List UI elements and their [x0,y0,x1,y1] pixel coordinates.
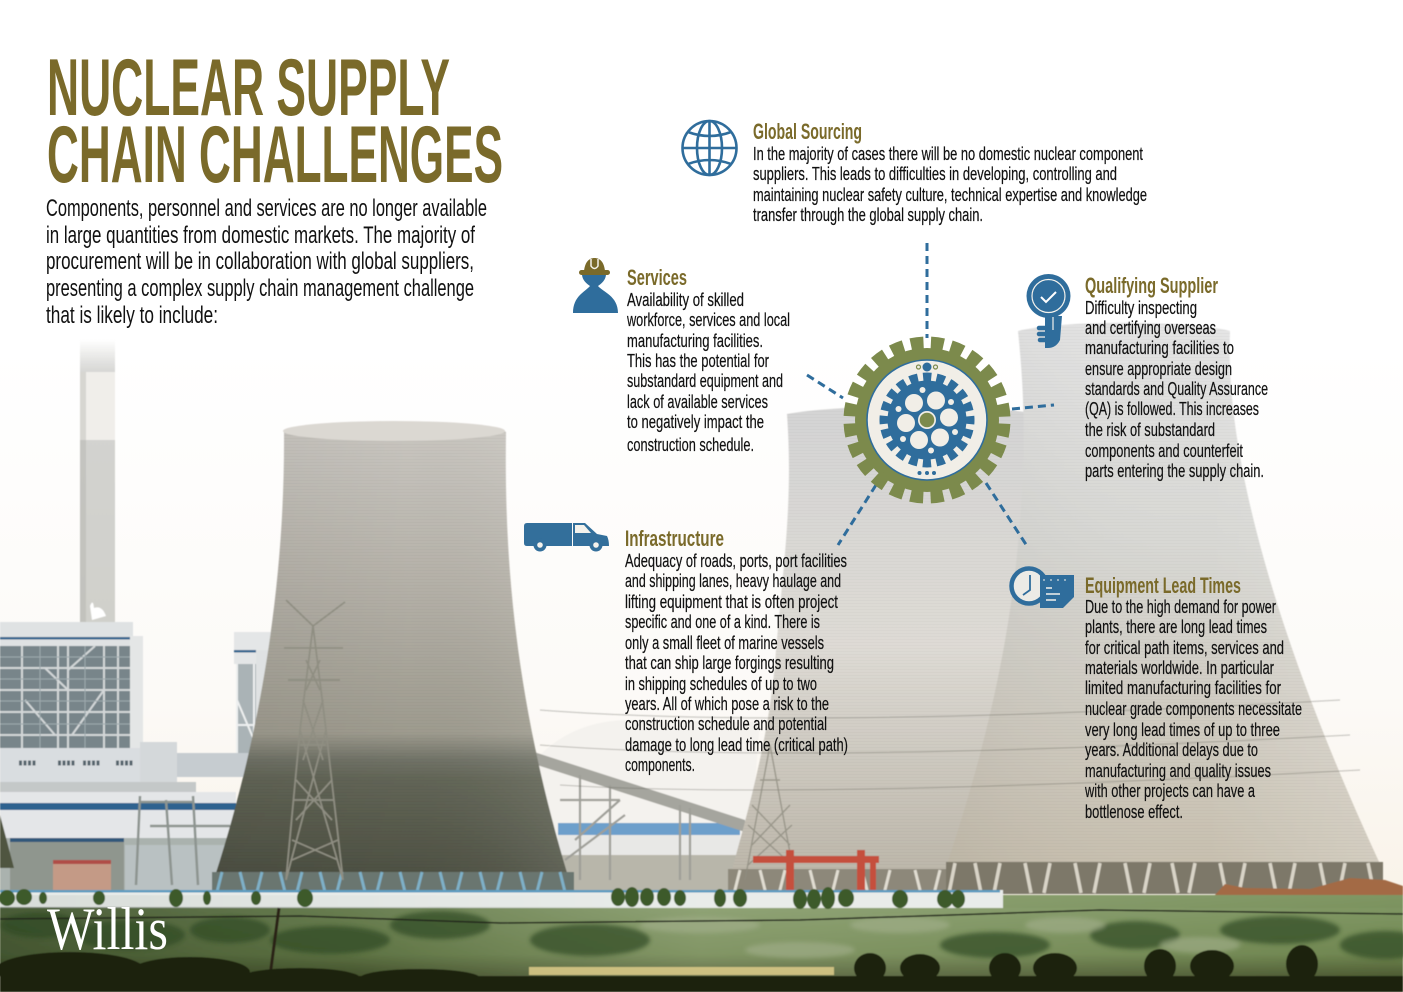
panel: services: manufacturing facilities. [627,331,763,351]
panel: qualifying supplier: (QA) is followed. This increases [1085,399,1259,419]
panel: qualifying supplier: components and counterfeit [1085,441,1243,461]
panel: services: Availability of skilled [627,290,744,310]
panel: equipment lead times [1084,573,1302,822]
panel: qualifying supplier: manufacturing facilities to [1085,338,1234,358]
panel: services: substandard equipment and [627,371,783,391]
panel: global sourcing: In the majority of cases there will be no domestic nuclear component [753,144,1143,164]
panel: qualifying supplier: parts entering the supply chain. [1085,461,1264,481]
panel: services: workforce, services and local [626,310,790,330]
panel: global sourcing: suppliers. This leads to difficulties in developing, controlling and [753,164,1117,184]
panel: infrastructure [625,526,848,775]
panel: equipment lead times: limited manufacturing facilities for [1085,678,1281,698]
panel: equipment lead times: bottlenose effect. [1085,802,1183,822]
intro text: presenting a complex supply chain management challenge [46,275,474,302]
middle cooling tower [728,406,1040,885]
panel: qualifying supplier: standards and Quality Assurance [1085,379,1268,399]
panel: qualifying supplier: and certifying overseas [1085,318,1216,338]
panel: equipment lead times: materials worldwide. In particular [1085,658,1274,678]
intro text: in large quantities from domestic markets. The majority of [46,222,475,249]
panel: infrastructure: lifting equipment that is often project [625,592,838,612]
left plant buildings [0,622,281,894]
panel: equipment lead times: plants, there are long lead times [1085,617,1267,637]
panel: equipment lead times: nuclear grade components necessitate [1085,699,1302,719]
right tower base [946,862,1383,894]
panel: qualifying supplier: ensure appropriate design [1085,359,1232,379]
panel: infrastructure: years. All of which pose a risk to the [625,694,829,714]
panel: qualifying supplier [1085,273,1268,481]
title [47,43,503,200]
panel: services: This has the potential for [627,351,769,371]
panel: infrastructure: specific and one of a kind. There is [625,612,820,632]
panel: infrastructure: damage to long lead time (critical path) [625,735,848,755]
panel: equipment lead times: Due to the high demand for power [1085,597,1276,617]
icon: globe [682,121,736,175]
intro text: Components, personnel and services are no longer available [46,195,487,222]
intro text: that is likely to include: [46,302,218,329]
panel: global sourcing: maintaining nuclear safety culture, technical expertise and knowledge [753,185,1147,205]
panel: services: construction schedule. [627,435,754,455]
panel: equipment lead times: for critical path items, services and [1085,638,1284,658]
panel: services: to negatively impact the [627,412,764,432]
middle tower base [728,869,960,893]
panel: qualifying supplier: the risk of substandard [1085,420,1215,440]
panel: infrastructure: in shipping schedules of up to two [625,674,817,694]
red gantry crane [753,850,879,892]
right cooling tower [947,323,1380,864]
panel: equipment lead times: with other projects can have a [1084,781,1256,801]
logo: Willis: Willis [47,896,168,962]
panel: equipment lead times: years. Additional delays due to [1085,740,1258,760]
left cooling tower [215,426,568,876]
title: CHAIN CHALLENGES [47,110,503,200]
panel: global sourcing [753,119,1147,225]
icon: magnifier with check [1026,274,1070,348]
intro text: procurement will be in collaboration with global suppliers, [46,248,474,275]
panel: qualifying supplier: Qualifying Supplier [1085,273,1218,298]
panel: infrastructure: only a small fleet of marine vessels [625,633,824,653]
ground and vegetation [0,887,1403,992]
panel: infrastructure: and shipping lanes, heavy haulage and [625,571,841,591]
icon: worker with hard hat [573,258,618,313]
panel: global sourcing: transfer through the global supply chain. [753,205,983,225]
panel: infrastructure: Infrastructure [625,526,724,551]
panel: infrastructure: that can ship large forgings resulting [625,653,834,673]
panel: services: Services [627,265,687,290]
intro text [46,195,487,329]
central gear icon [851,344,1003,496]
panel: equipment lead times: very long lead times of up to three [1085,720,1280,740]
faint power cables [540,700,1360,790]
dome and conveyor [534,720,760,890]
pylon [284,600,345,880]
panel: infrastructure: Adequacy of roads, ports, port facilities [625,551,847,571]
panel: services: lack of available services [627,392,768,412]
panel: services [626,265,790,455]
panel: qualifying supplier: Difficulty inspecting [1085,298,1197,318]
right steel pylon [745,745,795,880]
icon: clock and calendar [1012,568,1074,608]
title: NUCLEAR SUPPLY [47,43,450,133]
panel: equipment lead times: manufacturing and quality issues [1085,761,1271,781]
icon: delivery van [524,523,609,552]
panel: equipment lead times: Equipment Lead Times [1085,573,1241,598]
panel: infrastructure: components. [625,755,695,775]
panel: infrastructure: construction schedule and potential [625,714,827,734]
panel: global sourcing: Global Sourcing [753,119,862,144]
connector lines [807,243,1054,546]
left tower base legs [212,872,574,892]
chimney [80,340,115,625]
